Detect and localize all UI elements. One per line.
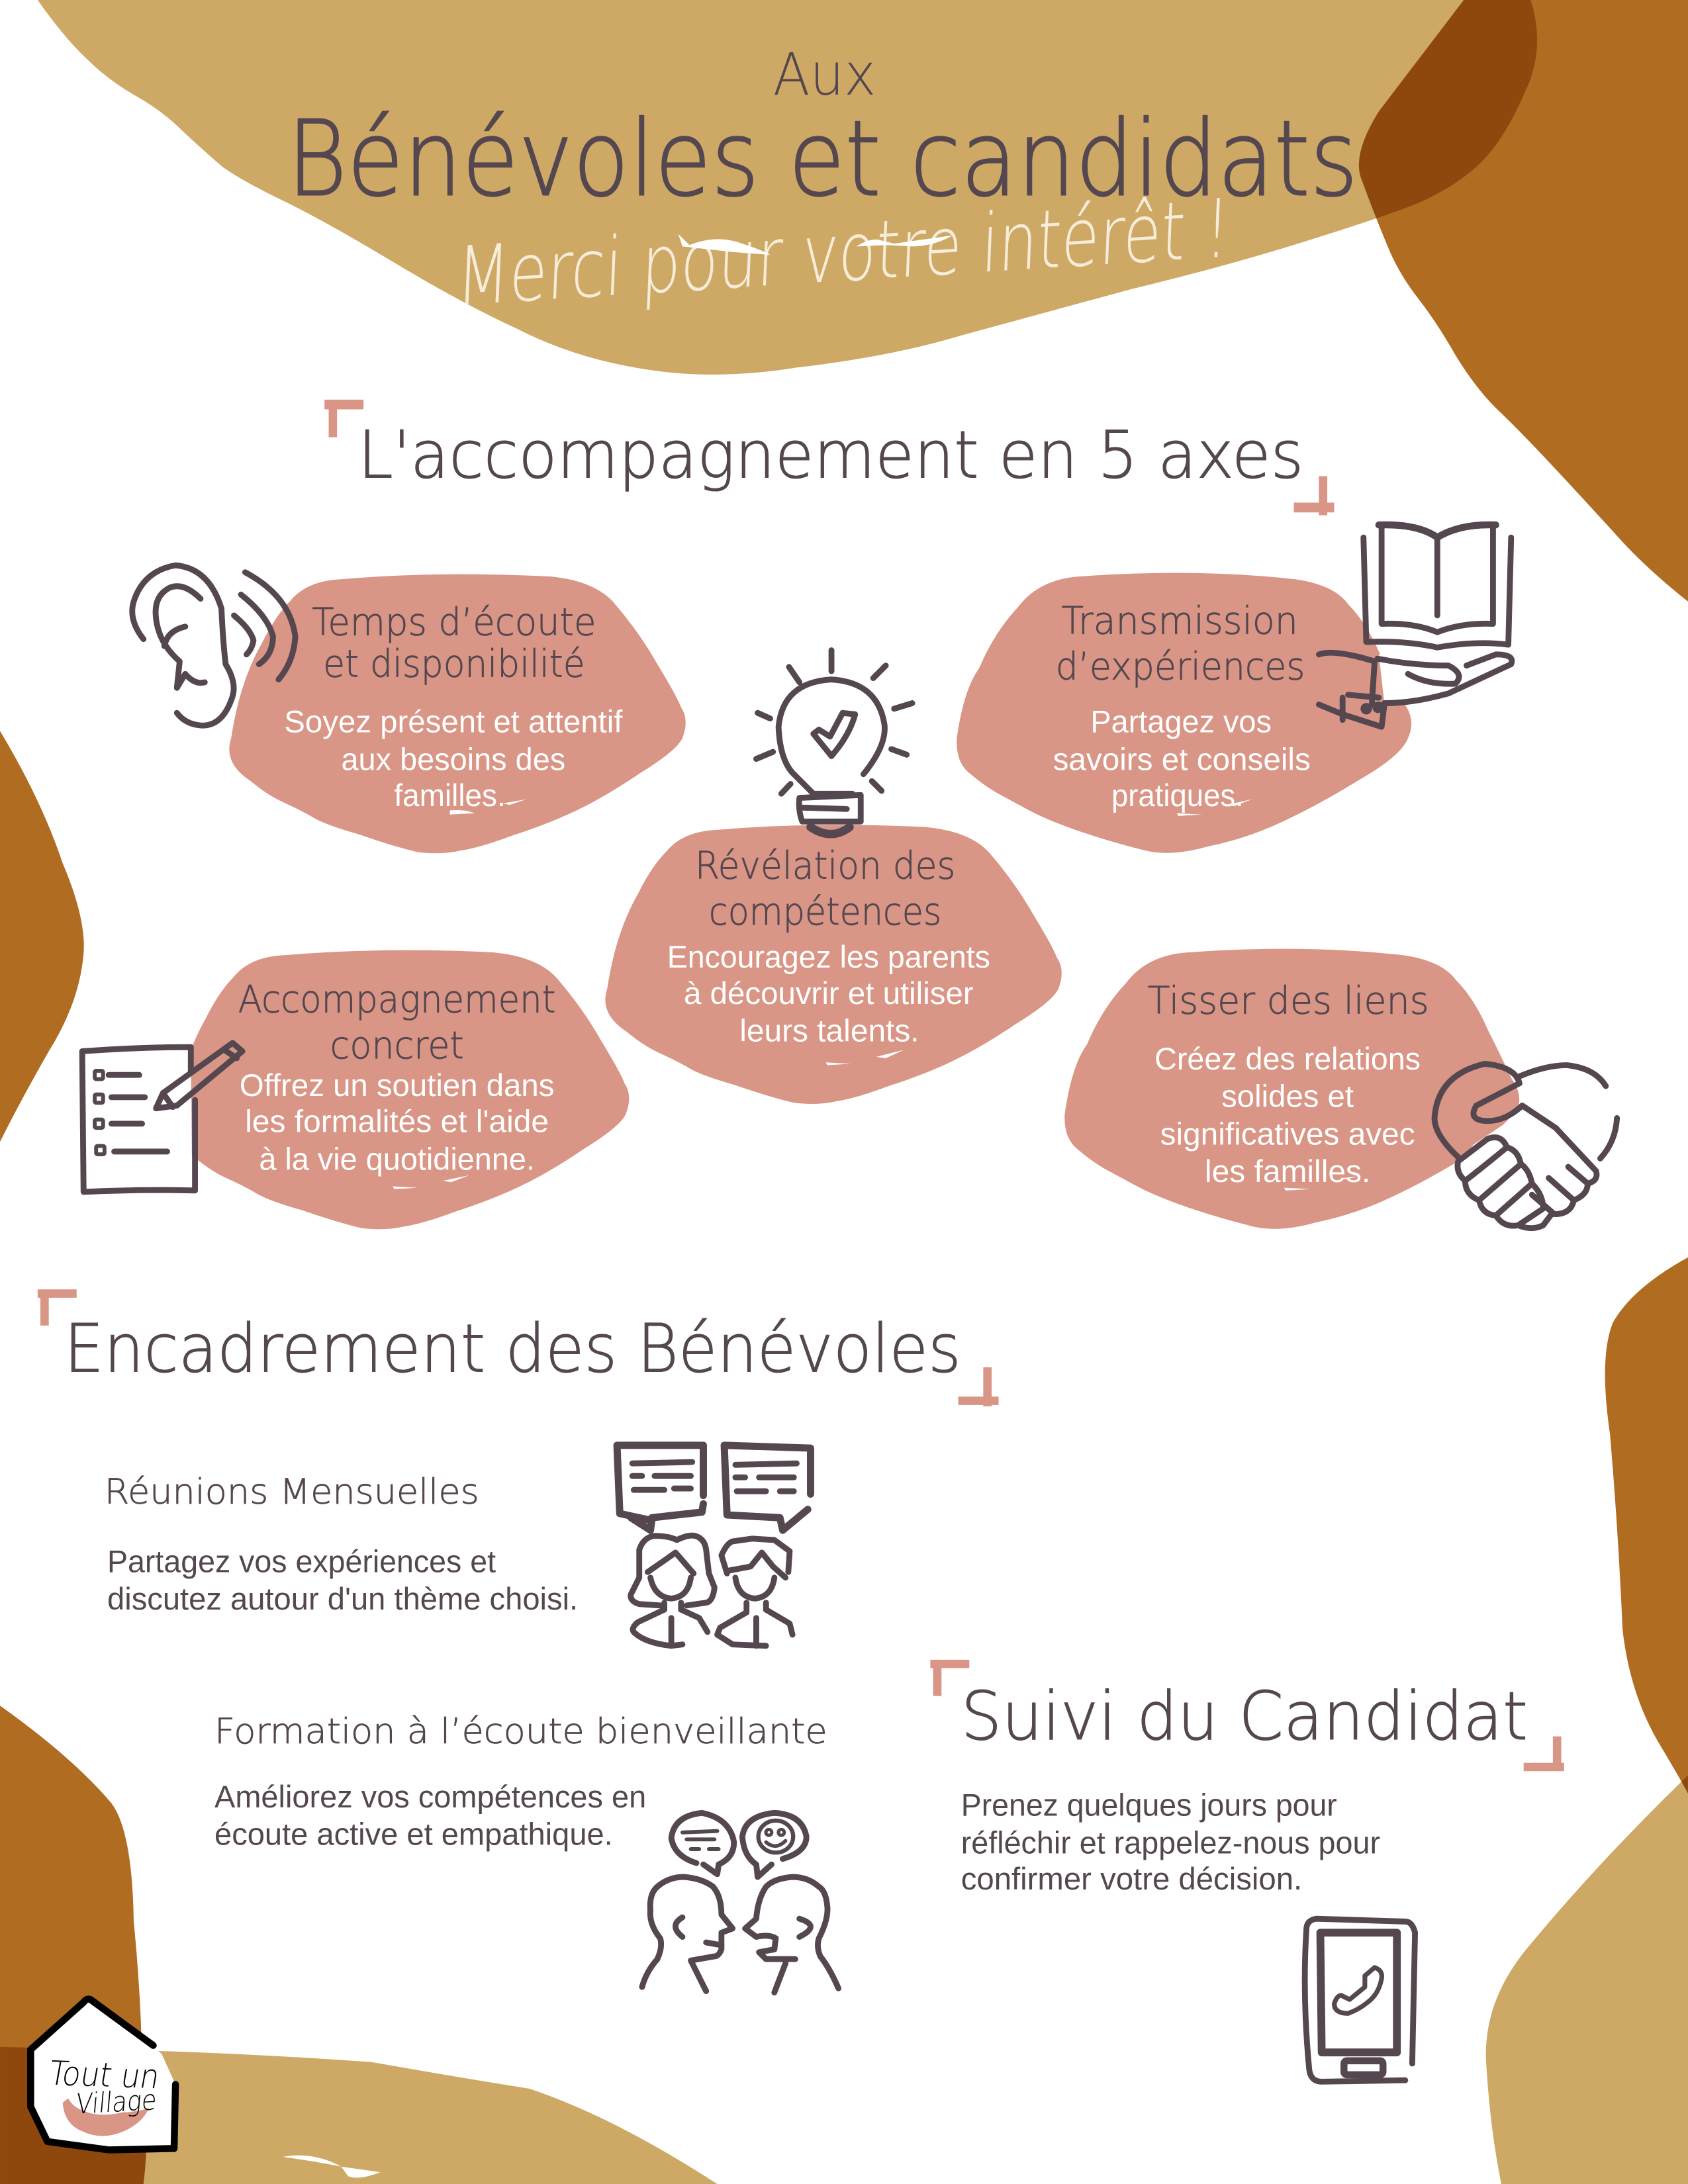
- text block: Réunions Mensuelles: Partagez vos expériences et: [107, 1544, 496, 1579]
- bracket bottom right: [1524, 1737, 1564, 1771]
- background: brown shape right: [1605, 1257, 1688, 1794]
- background: tan shape bottom right: [1486, 1775, 1688, 2184]
- panel: Tisser des liens: Tisser des liens: [1148, 979, 1429, 1023]
- panel: Transmission d'expériences: Partagez vos: [1090, 705, 1272, 740]
- bracket bottom right: [959, 1367, 999, 1406]
- panel: Temps d'écoute et disponibilité: aux besoins des: [341, 742, 565, 777]
- panel: Accompagnement concret: à la vie quotidienne.: [259, 1142, 535, 1177]
- text block: Formation à l'écoute bienveillante: écoute active et empathique.: [214, 1817, 613, 1852]
- text block: Réunions Mensuelles: Réunions Mensuelles: [105, 1472, 479, 1512]
- panel: Temps d'écoute et disponibilité: Temps d’écoute: [312, 600, 596, 644]
- background: brown shape left: [0, 731, 84, 1142]
- background: tan shape bottom left: [0, 2047, 718, 2184]
- text block: Suivi du Candidat body: confirmer votre décision.: [961, 1862, 1302, 1897]
- title block: [287, 40, 1358, 324]
- text block: Formation à l'écoute bienveillante: [214, 1711, 827, 1852]
- panel: Révélation des compétences: compétences: [709, 890, 941, 934]
- logo: Tout un Village: [30, 1999, 175, 2150]
- icon: two people with speech bubbles: [617, 1445, 811, 1646]
- text block: Réunions Mensuelles: [105, 1472, 578, 1617]
- background: brown shape bottom left: [0, 1706, 147, 2184]
- heading: Encadrement des Bénévoles: Encadrement des Bénévoles: [64, 1309, 961, 1387]
- panel: Tisser des liens: Créez des relations: [1154, 1042, 1421, 1077]
- panel: Transmission d'expériences: d’expériences: [1056, 645, 1305, 689]
- icon: handshake: [1434, 1064, 1617, 1228]
- panel: Révélation des compétences: Révélation des: [695, 844, 955, 888]
- panel: Temps d'écoute et disponibilité: et disponibilité: [323, 643, 585, 686]
- heading: Suivi du Candidat: Suivi du Candidat: [961, 1677, 1528, 1755]
- panel: Tisser des liens: significatives avec: [1160, 1116, 1415, 1152]
- panel: Tisser des liens: solides et: [1221, 1079, 1354, 1115]
- text block: Suivi du Candidat body: [961, 1788, 1380, 1897]
- icon: two heads talking: [642, 1813, 839, 1993]
- panel: Révélation des compétences: Encouragez les parents: [667, 940, 990, 975]
- heading: L'accompagnement en 5 axes: [324, 400, 1335, 515]
- logo: Tout un Village: Village: [75, 2083, 158, 2120]
- panel: Accompagnement concret: les formalités et l'aide: [245, 1104, 549, 1139]
- panel: Accompagnement concret: Offrez un soutien dans: [240, 1068, 554, 1103]
- bracket top left: [324, 400, 363, 437]
- bracket top left: [38, 1289, 77, 1326]
- panel: Tisser des liens: les familles.: [1205, 1154, 1370, 1189]
- panel: Transmission d'expériences: Transmission: [1061, 599, 1298, 643]
- bracket bottom right: [1294, 477, 1335, 515]
- background: tan shape top: [38, 0, 1537, 375]
- subtitle: Merci pour votre intérêt: Merci pour votre intérêt !: [455, 181, 1231, 324]
- heading: Suivi du Candidat: [930, 1660, 1564, 1771]
- heading: Encadrement des Bénévoles: [38, 1289, 999, 1406]
- text block: Réunions Mensuelles: discutez autour d'un thème choisi.: [107, 1582, 578, 1617]
- panel: Accompagnement concret: [173, 950, 629, 1229]
- bracket top left: [930, 1660, 969, 1696]
- text block: Formation à l'écoute bienveillante: Améliorez vos compétences en: [214, 1780, 646, 1815]
- text block: Suivi du Candidat body: Prenez quelques jours pour: [961, 1788, 1337, 1823]
- white brush marks on subtitle: [679, 234, 953, 255]
- white brush mark bottom: [283, 2156, 380, 2178]
- logo: Tout un Village: Tout un: [46, 2054, 163, 2096]
- panel: Tisser des liens: [1064, 949, 1519, 1229]
- text block: Formation à l'écoute bienveillante: Formation à l’écoute bienveillante: [214, 1711, 827, 1752]
- background: brown shape top right: [1359, 0, 1688, 602]
- title: Aux: Aux: [773, 40, 876, 109]
- icon: ear: [132, 565, 295, 725]
- title: Bénévoles et candidats: Bénévoles et candidats: [287, 99, 1358, 220]
- icon: phone: [1305, 1919, 1415, 2081]
- panel: Temps d'écoute et disponibilité: Soyez présent et attentif: [284, 705, 623, 740]
- panel: Accompagnement concret: concret: [330, 1024, 464, 1068]
- panel: Temps d'écoute et disponibilité: familles.: [394, 778, 506, 813]
- panel: Révélation des compétences: leurs talents.: [739, 1014, 919, 1049]
- icon: lightbulb with check: [756, 651, 912, 834]
- panel: Transmission d'expériences: [957, 573, 1411, 853]
- panel: Temps d'écoute et disponibilité: [229, 574, 686, 853]
- panel: Révélation des compétences: à découvrir et utiliser: [684, 976, 974, 1011]
- icon: open book on hand: [1319, 525, 1512, 727]
- heading: L'accompagnement en 5 axes: L'accompagnement en 5 axes: [358, 418, 1303, 494]
- panel: Révélation des compétences: [605, 825, 1062, 1104]
- panel: Transmission d'expériences: pratiques.: [1111, 778, 1244, 813]
- panel: Accompagnement concret: Accompagnement: [238, 978, 555, 1022]
- icon: clipboard and pencil: [82, 1043, 242, 1192]
- panel: Transmission d'expériences: savoirs et conseils: [1053, 742, 1311, 777]
- text block: Suivi du Candidat body: réfléchir et rappelez-nous pour: [961, 1825, 1380, 1860]
